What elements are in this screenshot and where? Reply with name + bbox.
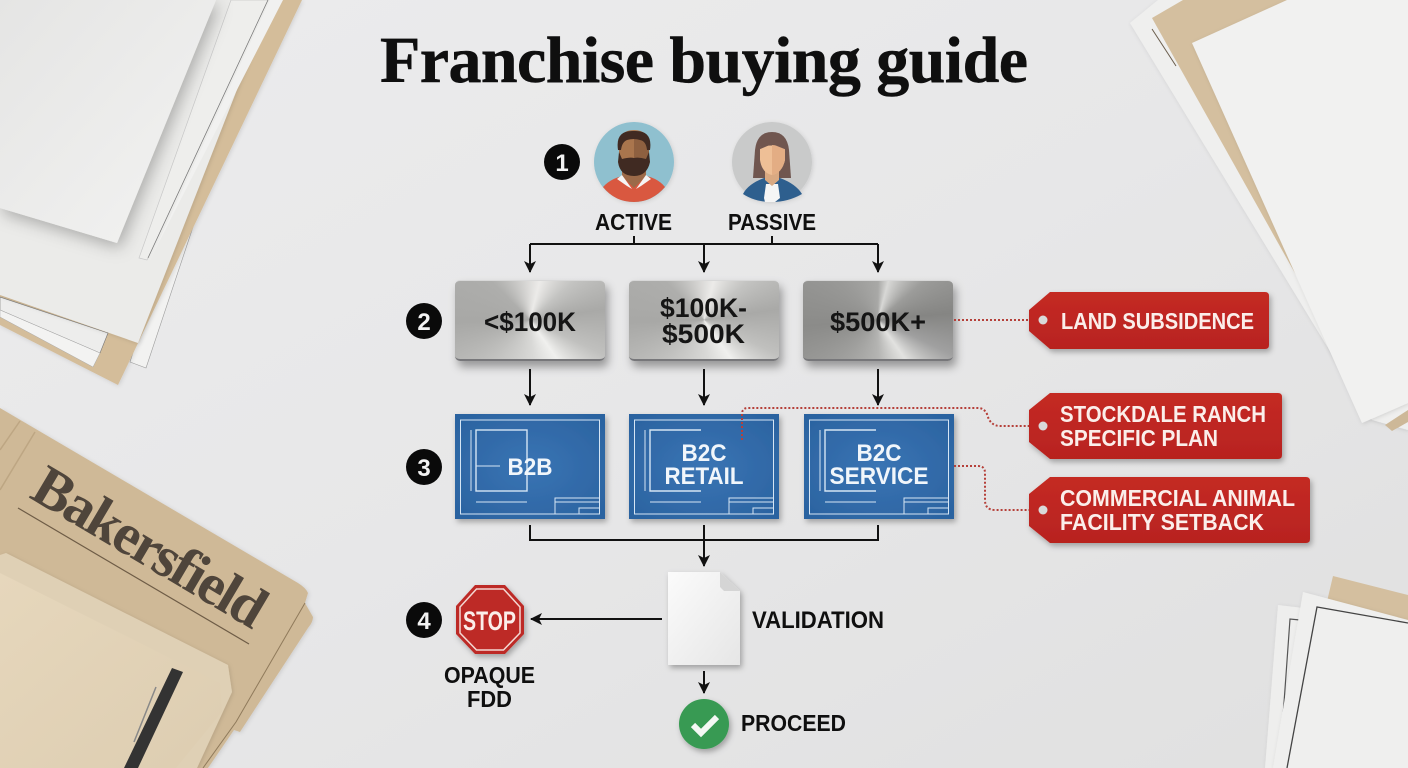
arrows: budget tiers to business types [530,369,878,405]
arrow: validation to stop [531,618,662,620]
bracket: business types to validation [530,525,878,566]
step 2 badge: 2 [417,309,431,336]
label: opaque FDD [444,662,535,712]
label: passive: PASSIVE [728,209,816,235]
blueprint: B2C service: SERVICE [830,463,928,490]
risk tag: land subsidence: LAND SUBSIDENCE [1061,308,1254,334]
icon: active investor avatar [594,122,674,202]
risk tag: commercial animal facility setback: FACILITY SETBACK [1060,509,1264,535]
risk tag: Stockdale Ranch specific plan: SPECIFIC PLAN [1060,425,1218,451]
arrow: validation to proceed [703,671,705,693]
blueprint: B2B: B2B [508,454,552,481]
step 4 badge [406,602,442,638]
label: opaque FDD: FDD [467,686,512,712]
label: active: ACTIVE [595,209,672,235]
folder label: Bakersfield [21,452,279,641]
step 2 badge [406,303,442,339]
connector: investor types to budget tiers [530,236,878,272]
step 1 badge: 1 [555,150,569,177]
paper stack: top right [1130,0,1408,431]
blueprint: B2B [455,414,605,519]
budget plate: under 100K [445,270,620,380]
icon: stop sign: STOP [463,606,516,636]
blueprint: B2C service [804,414,954,519]
budget plate: 100K to 500K [619,270,794,380]
folder: Bakersfield [0,408,313,768]
dotted connectors to risk tags [742,320,1029,510]
step 3 badge: 3 [417,455,431,482]
risk tag: land subsidence [1029,292,1269,349]
icon: pen [124,668,183,768]
budget plate: under 100K: <$100K [484,307,576,337]
label: proceed: PROCEED [741,710,846,736]
icon: stop sign [456,585,524,654]
budget plate: 100K to 500K: $500K [662,319,746,349]
icon: passive investor avatar [732,122,812,202]
blueprint: B2C service: B2C [856,440,902,467]
icon: green check [679,699,729,749]
blueprint: B2C retail [629,414,779,519]
blueprint: B2C retail: B2C [682,440,726,467]
folder rule [18,508,249,644]
risk tag: Stockdale Ranch specific plan [1029,393,1282,459]
budget plate: 100K to 500K: $100K- [660,293,747,323]
inner file sheet [0,553,232,768]
step 4 badge: 4 [417,608,431,635]
paper stack: bottom right [1265,576,1408,768]
budget plate: 500K plus [793,270,968,380]
risk tag: commercial animal facility setback: COMMERCIAL ANIMAL [1060,485,1295,511]
budget plate: 500K plus: $500K+ [830,307,926,337]
paper stack: top left [0,0,302,385]
label: validation: VALIDATION [752,607,884,634]
title: Franchise buying guide [380,24,1028,97]
label: opaque FDD: OPAQUE [444,662,535,688]
step 1 badge [544,144,580,180]
blueprint: B2C retail: RETAIL [664,463,744,490]
risk tag: Stockdale Ranch specific plan: STOCKDALE RANCH [1060,401,1266,427]
risk tag: commercial animal facility setback [1029,477,1310,543]
icon: validation document [668,572,740,665]
step 3 badge [406,449,442,485]
